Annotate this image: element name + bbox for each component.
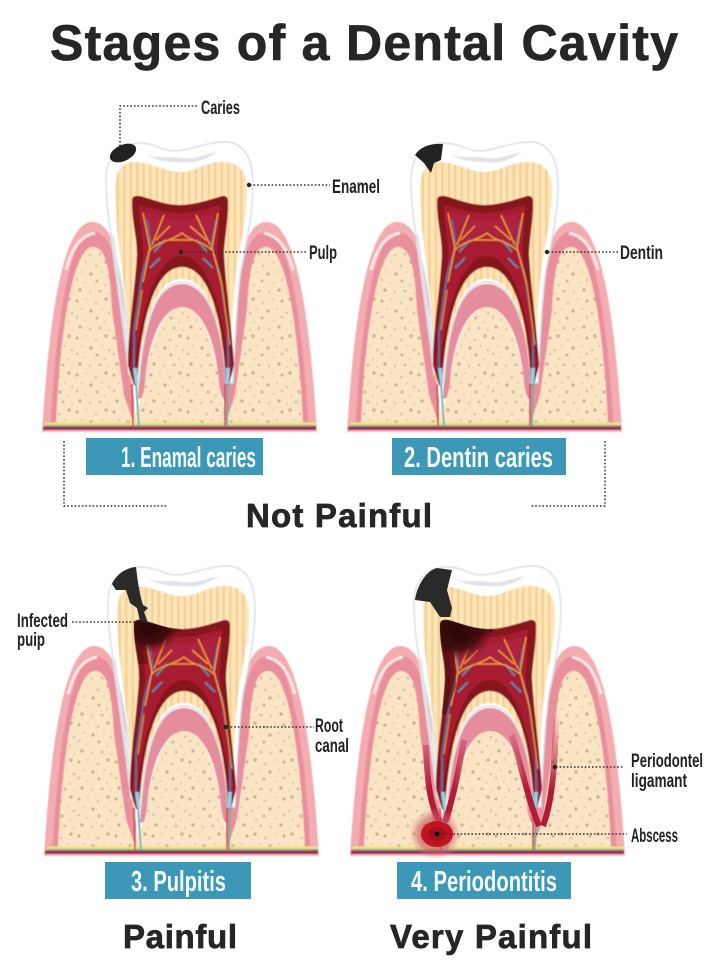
infected pulp shading bbox=[134, 620, 182, 664]
badge: 2. Dentin caries bbox=[392, 438, 566, 475]
icon: small caries bbox=[107, 140, 139, 166]
callout: enamel bbox=[247, 177, 380, 198]
callout: pulp bbox=[179, 243, 337, 264]
callout: root canal: canal bbox=[315, 736, 349, 757]
callout: pulp: Pulp bbox=[309, 243, 337, 264]
panel: stage 1 enamel caries bbox=[42, 98, 380, 475]
callout: periodontal ligament: ligamant bbox=[631, 771, 687, 792]
callout: abscess: Abscess bbox=[631, 826, 678, 847]
badge: 3. Pulpitis bbox=[105, 862, 251, 899]
callout: periodontal ligament bbox=[553, 751, 703, 792]
callout: enamel: Enamel bbox=[332, 177, 380, 198]
badge: 1. Enamal caries: 1. Enamal caries bbox=[121, 442, 256, 474]
infected pulp shading bbox=[440, 620, 493, 714]
callout: root canal bbox=[224, 716, 349, 757]
icon: abscess bbox=[409, 808, 461, 860]
heading: not painful: Not Painful bbox=[246, 497, 432, 534]
badge: 4. Periodontitis bbox=[397, 862, 571, 899]
bracket: right dotted bbox=[530, 441, 605, 506]
inflamed ligament bbox=[426, 717, 556, 826]
callout: infected pulp: puip bbox=[17, 630, 45, 651]
panel: stage 2 dentin caries bbox=[347, 142, 663, 475]
badge: 2. Dentin caries: 2. Dentin caries bbox=[404, 442, 553, 474]
bracket: left dotted bbox=[64, 441, 168, 506]
heading: very painful: Very Painful bbox=[390, 918, 592, 955]
callout: caries: Caries bbox=[201, 98, 240, 119]
icon: pulpitis caries bbox=[112, 567, 148, 623]
badge: 3. Pulpitis: 3. Pulpitis bbox=[131, 866, 226, 898]
callout: infected pulp: Infected bbox=[17, 611, 68, 632]
badge: 4. Periodontitis: 4. Periodontitis bbox=[411, 866, 557, 898]
icon: deep caries bbox=[415, 568, 452, 617]
callout: root canal: Root bbox=[315, 716, 343, 737]
heading: painful: Painful bbox=[123, 918, 237, 955]
callout: dentin: Dentin bbox=[620, 243, 663, 264]
panel: stage 3 pulpitis bbox=[17, 566, 349, 899]
callout: infected pulp bbox=[17, 611, 135, 651]
panel: stage 4 periodontitis bbox=[350, 566, 703, 899]
badge: 1. Enamal caries bbox=[86, 438, 263, 475]
icon: dentin caries bbox=[415, 144, 443, 173]
title: Stages of a Dental Cavity bbox=[50, 15, 678, 71]
callout: caries bbox=[120, 98, 240, 146]
callout: dentin bbox=[545, 243, 663, 264]
